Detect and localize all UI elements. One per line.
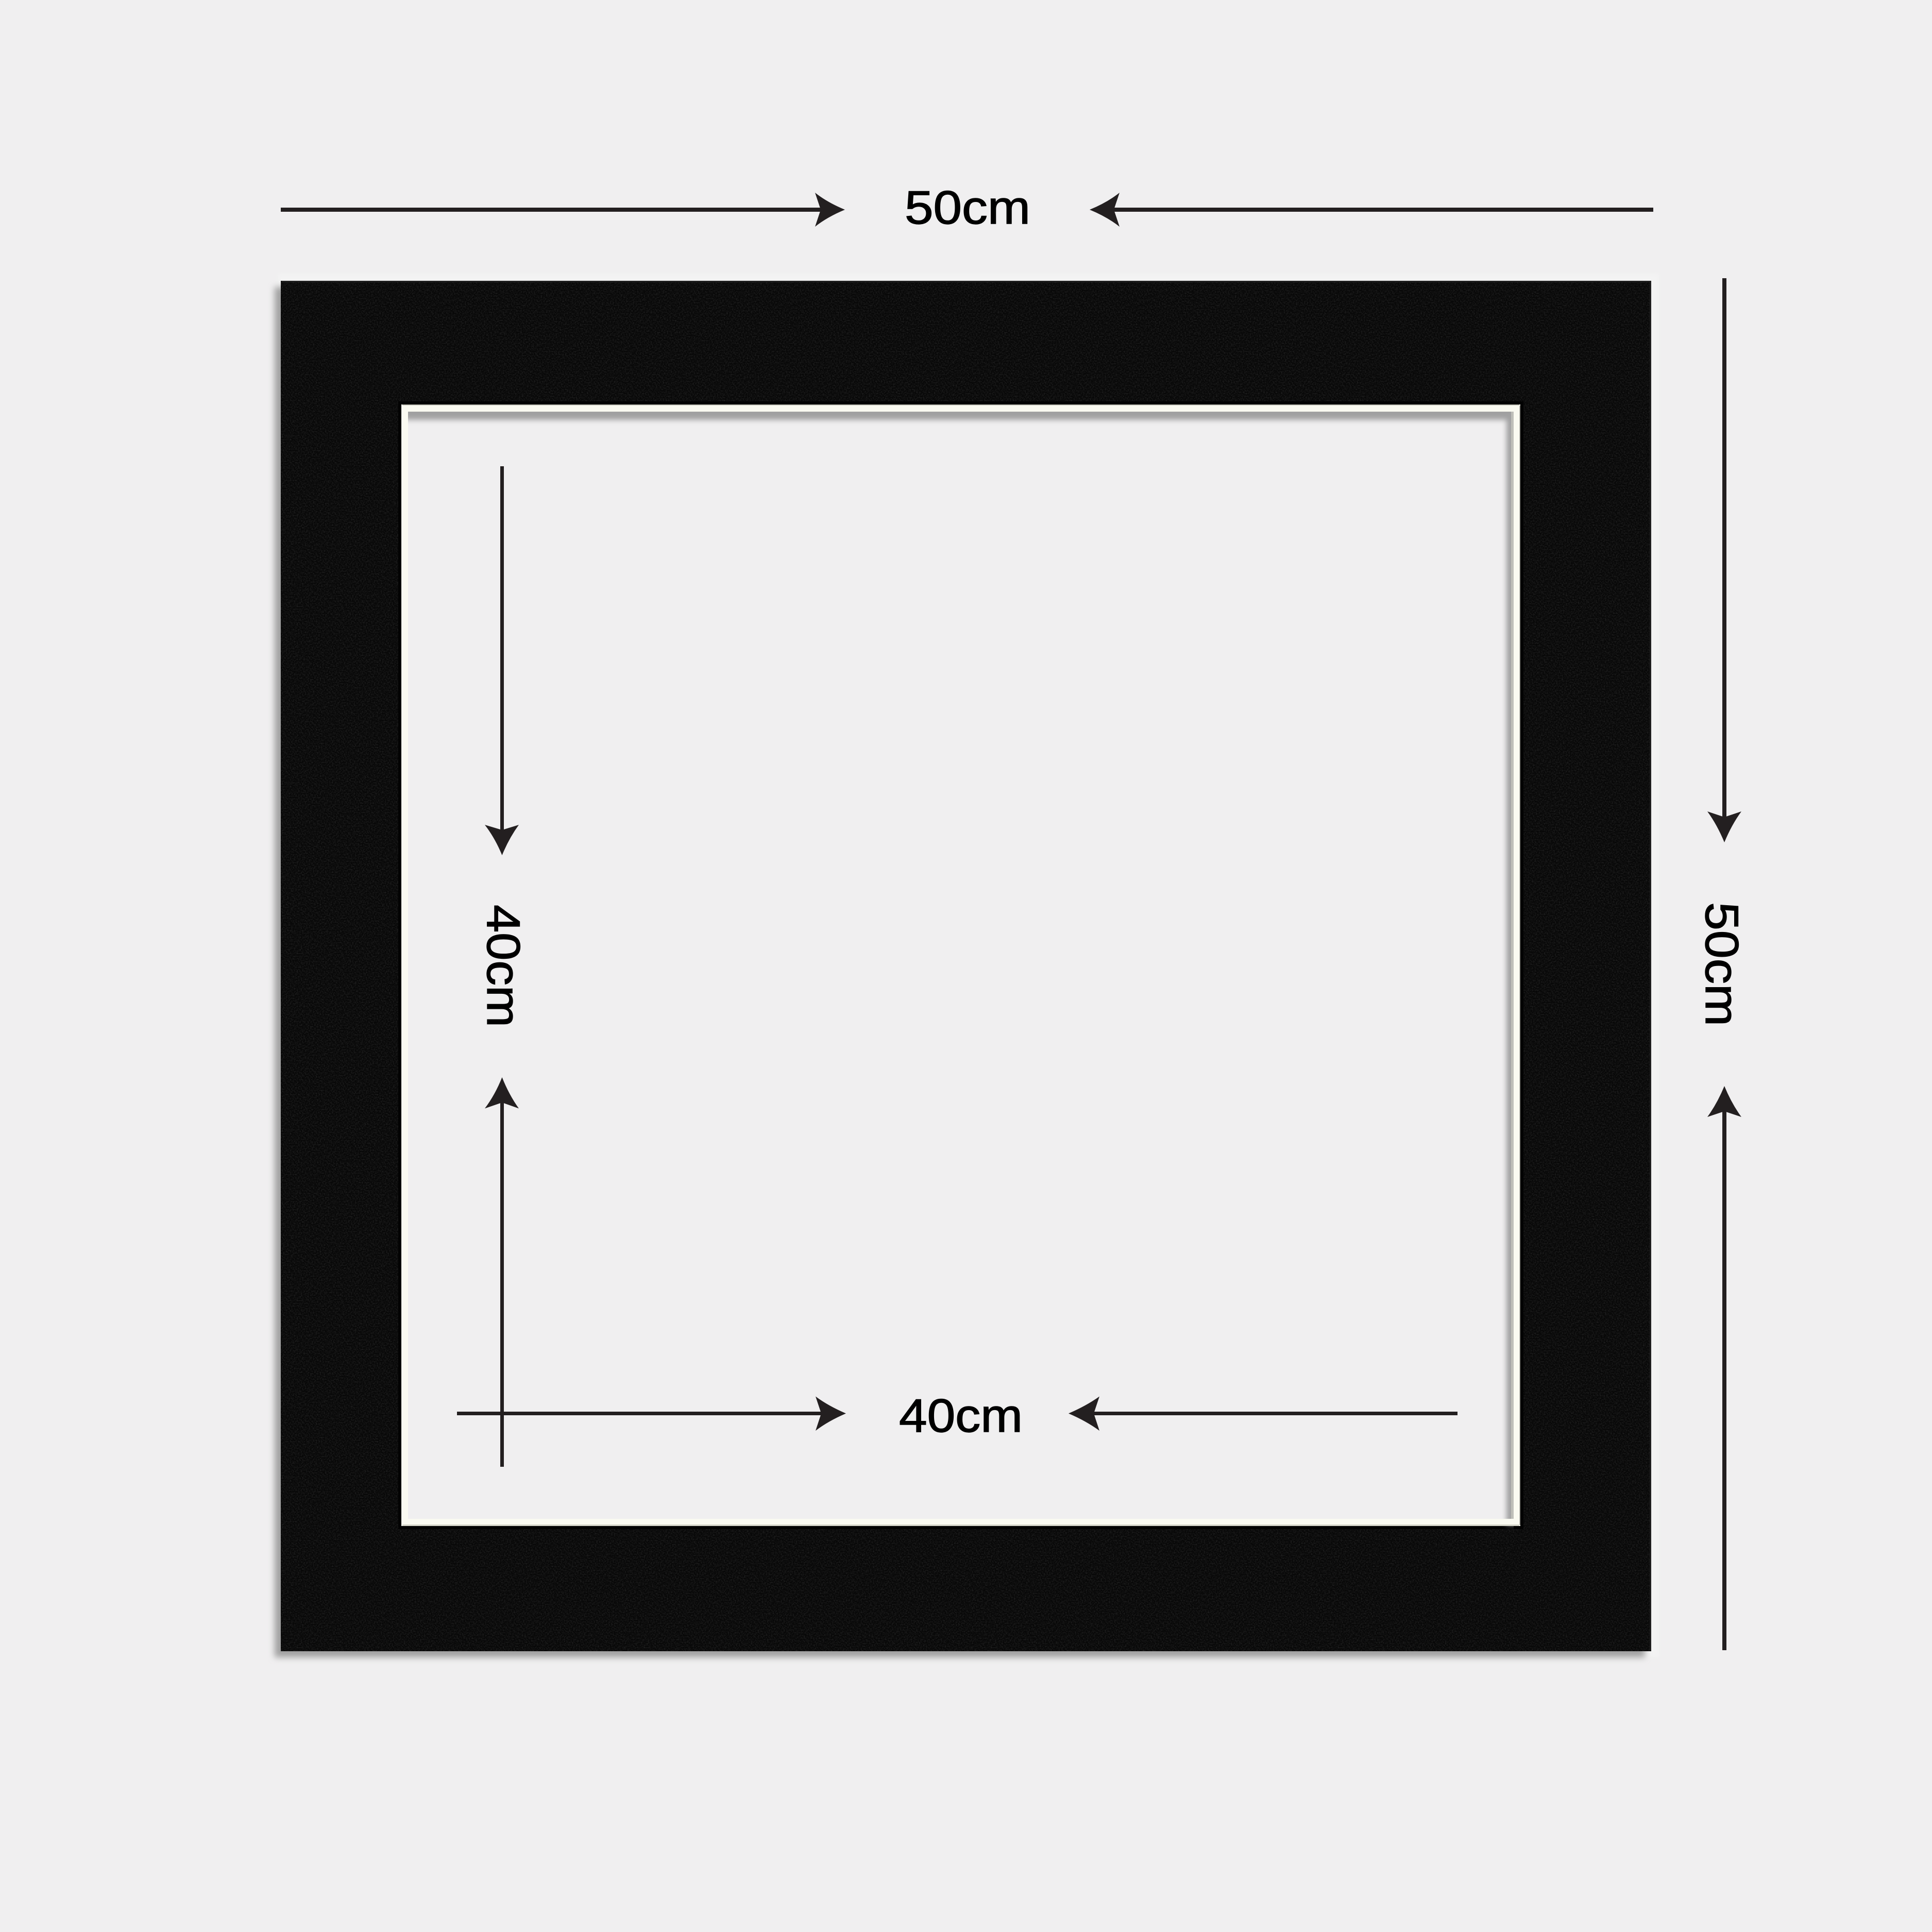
arrow: inner left dimension, pointing down xyxy=(485,466,519,855)
arrow: inner bottom dimension, pointing left xyxy=(1069,1396,1458,1431)
arrow: right dimension, pointing up xyxy=(1707,1086,1741,1650)
arrow: inner left dimension, pointing up xyxy=(485,1077,519,1467)
label: inner bottom 40cm: 40cm xyxy=(899,1390,1023,1442)
panel: mount board with aperture xyxy=(275,274,1659,1657)
aperture opening xyxy=(361,361,1546,1526)
arrow: inner bottom dimension, pointing right xyxy=(457,1396,846,1431)
label: top 50cm: 50cm xyxy=(905,182,1030,234)
label: inner left 40cm: 40cm xyxy=(477,905,529,1027)
arrow: top dimension, pointing right xyxy=(281,193,845,227)
label: right 50cm: 50cm xyxy=(1696,902,1748,1026)
arrow: right dimension, pointing down xyxy=(1707,278,1741,842)
arrow: top dimension, pointing left xyxy=(1090,193,1653,227)
